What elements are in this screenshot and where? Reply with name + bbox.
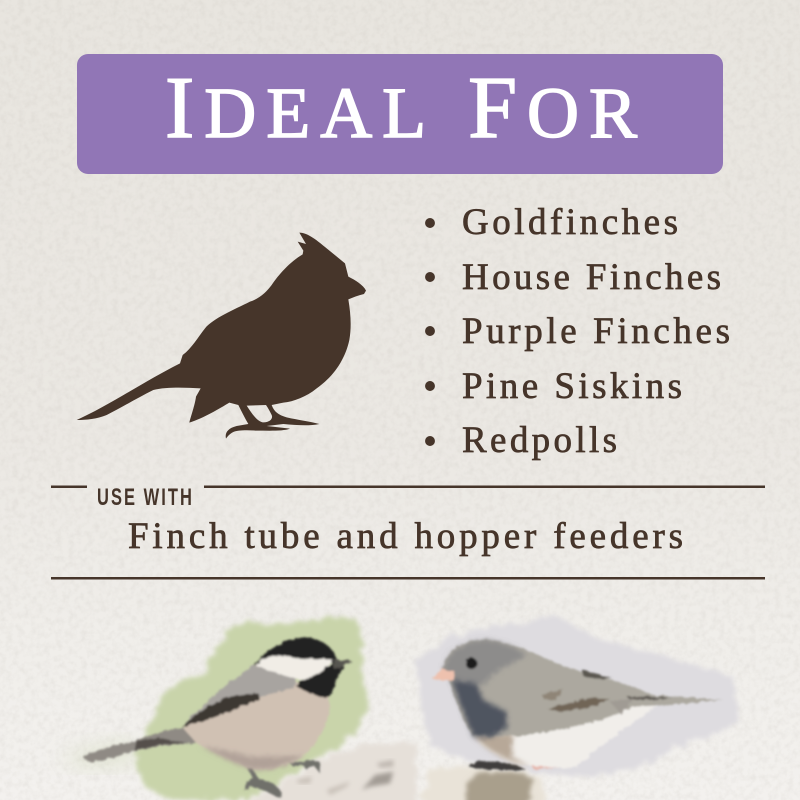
- bullet item: Pine Siskins: Pine Siskins: [462, 366, 682, 407]
- feeder text: Finch tube and hopper feeders: [128, 516, 683, 557]
- bullet item: Goldfinches: Goldfinches: [462, 202, 678, 243]
- junco body: [432, 640, 723, 770]
- chickadee body: [83, 637, 352, 798]
- bullet item: House Finches: House Finches: [462, 257, 721, 298]
- illustration: junco on a stump: [417, 615, 740, 800]
- use with label: USE WITH: [97, 484, 194, 511]
- title: IDEAL FOR: [165, 60, 637, 157]
- bullet item: Redpolls: Redpolls: [462, 420, 617, 461]
- green watercolor wash: [60, 617, 368, 800]
- branch: [240, 742, 417, 800]
- icon: bird silhouette: [77, 233, 366, 439]
- bullet item: Purple Finches: Purple Finches: [462, 311, 730, 352]
- title banner: [77, 54, 723, 174]
- bullet list of finches: [425, 202, 730, 461]
- use with section: [51, 484, 765, 580]
- illustration: chickadee on a branch: [60, 617, 417, 800]
- stump: [420, 767, 548, 800]
- grey watercolor wash: [417, 615, 740, 777]
